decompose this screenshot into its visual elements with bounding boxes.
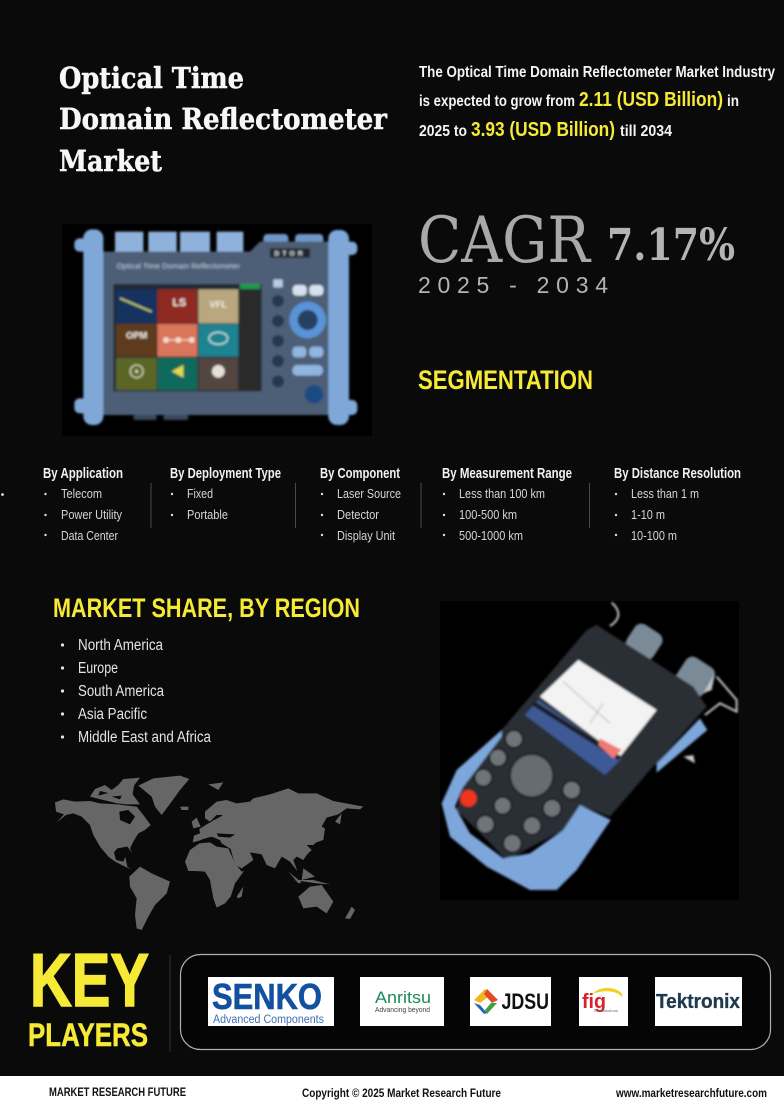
heading: segmentation: SEGMENTATION (418, 365, 593, 395)
title (59, 61, 388, 178)
heading: market share by region: MARKET SHARE, BY REGION (53, 593, 360, 623)
logo: JDSU (470, 977, 551, 1026)
image: OTDR tablet device: LS (173, 297, 186, 309)
heading: key players (28, 938, 149, 1053)
segment: by deployment type: By Deployment Type (170, 466, 281, 482)
market growth summary: till 2034 (620, 123, 672, 140)
title: Market (59, 144, 163, 178)
CAGR figure: CAGR (418, 204, 592, 278)
footer (0, 1076, 784, 1108)
segment: by deployment type: Portable (187, 507, 228, 522)
market growth summary: 2025 to (419, 123, 467, 140)
CAGR figure: 7.17% (607, 220, 735, 271)
market growth summary: 2.11 (USD Billion) (579, 89, 723, 111)
segment: by measurement range: 500-1000 km (459, 528, 523, 543)
segment: by deployment type (170, 466, 281, 522)
footer: Copyright © 2025 Market Research Future (302, 1086, 501, 1100)
segment: by component (320, 466, 401, 543)
region list: North America (78, 637, 163, 654)
segment: by measurement range: By Measurement Range (442, 466, 572, 482)
logo: Tektronix: Tektronix (656, 991, 740, 1013)
region list: Europe (78, 660, 118, 677)
segment: by component: By Component (320, 466, 400, 482)
image: handheld OTDR device (440, 601, 739, 900)
segment: by application: By Application (43, 466, 123, 482)
world map (55, 776, 363, 930)
CAGR figure (418, 204, 735, 298)
logo: JDSU: JDSU (502, 989, 549, 1014)
market growth summary (419, 64, 775, 141)
logo: Anritsu (360, 977, 444, 1026)
logo: Fig: The Solutions (593, 1008, 618, 1013)
segment: by component: Detector (337, 507, 380, 522)
segment: by component: Display Unit (337, 528, 395, 543)
logo: Senko: Advanced Components (213, 1014, 324, 1026)
heading: key players: KEY (30, 938, 149, 1022)
region list: South America (78, 683, 164, 700)
segment: by distance resolution: 10-100 m (631, 528, 677, 543)
segment: by distance resolution: 1-10 m (631, 507, 665, 522)
CAGR figure: 2025 - 2034 (418, 272, 608, 298)
panel: company logos (180, 954, 770, 1050)
segment: by measurement range: Less than 100 km (459, 486, 545, 501)
segment: by application: Data Center (61, 528, 119, 543)
segment: by distance resolution: By Distance Resolution (614, 466, 741, 482)
logo: Anritsu: Anritsu (375, 988, 431, 1007)
region list: Asia Pacific (78, 706, 147, 723)
image: OTDR tablet device: VFL (210, 299, 227, 309)
segment: by measurement range: 100-500 km (459, 507, 517, 522)
stray bullet (1, 493, 4, 496)
image: OTDR tablet device: DTOR (274, 251, 303, 258)
segment: by component: Laser Source (337, 486, 401, 501)
segment: by application (43, 466, 123, 543)
segment: by distance resolution (614, 466, 741, 543)
market growth summary: 3.93 (USD Billion) (471, 119, 615, 141)
image: OTDR tablet device: OPM (126, 331, 148, 341)
logo: Fig (579, 977, 628, 1026)
segment: by deployment type: Fixed (187, 486, 213, 501)
logo: Tektronix (655, 977, 742, 1026)
segment: by application: Power Utility (61, 507, 122, 522)
segment: by application: Telecom (61, 486, 102, 501)
region list (61, 637, 211, 746)
logo: Anritsu: Advancing beyond (375, 1005, 430, 1014)
image: OTDR tablet device: Optical Time Domain Reflectometer (117, 264, 241, 271)
segment: by distance resolution: Less than 1 m (631, 486, 699, 501)
region list: Middle East and Africa (78, 729, 211, 746)
title: Optical Time (59, 61, 244, 95)
image: OTDR tablet device (62, 224, 372, 436)
title: Domain Reflectometer (59, 102, 388, 136)
market growth summary: in (727, 93, 739, 110)
logo: Fig: fig (582, 991, 606, 1013)
segment: by measurement range (442, 466, 572, 543)
logo: Senko: SENKO (212, 976, 322, 1017)
market growth summary: is expected to grow from (419, 93, 575, 110)
footer: MARKET RESEARCH FUTURE (49, 1085, 186, 1099)
heading: key players: PLAYERS (28, 1017, 148, 1053)
